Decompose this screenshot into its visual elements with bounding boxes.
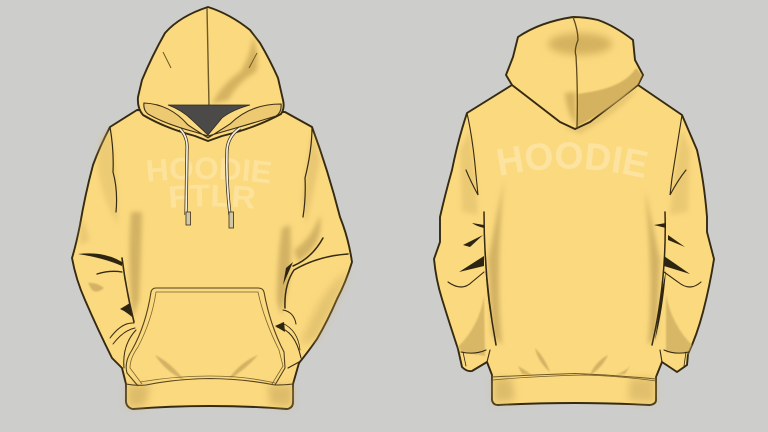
hood shading — [212, 36, 257, 104]
dark under-sleeve creases — [78, 253, 293, 332]
front hood — [138, 7, 284, 141]
left drawstring — [180, 129, 190, 225]
front hoodie — [71, 6, 353, 412]
back dark creases — [459, 223, 690, 345]
front chest print: FTLR — [170, 184, 254, 208]
hood folds — [163, 52, 257, 68]
back hood — [506, 17, 643, 129]
front body and sleeves — [72, 110, 352, 409]
hood centre seam — [207, 8, 209, 106]
hood shadow on back — [565, 88, 638, 134]
hood opening rim — [144, 103, 281, 138]
back hood shading — [548, 33, 642, 127]
front chest print — [147, 158, 271, 208]
back hem rib — [492, 374, 656, 381]
sleeve seams and folds — [97, 127, 348, 368]
back hoodie — [433, 16, 715, 407]
right drawstring — [227, 128, 240, 228]
kangaroo pocket — [126, 288, 293, 386]
back shading — [458, 130, 692, 403]
back body and sleeves — [434, 85, 714, 405]
front chest print: HOODIE — [147, 158, 271, 184]
back hood centre seam — [573, 17, 578, 128]
front shading — [79, 127, 350, 408]
back print: HOODIE — [497, 142, 648, 178]
back sleeve seams — [448, 113, 701, 366]
hood inner dark lining — [168, 105, 250, 135]
